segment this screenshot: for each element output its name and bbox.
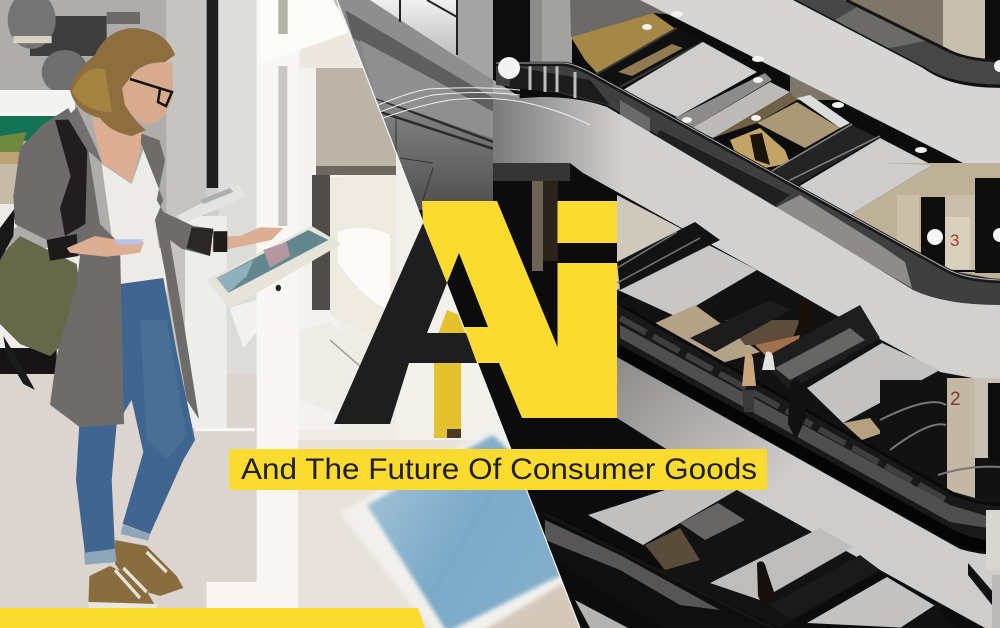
shirt bbox=[102, 150, 164, 248]
ceiling top centre bbox=[570, 0, 703, 87]
hair bbox=[70, 28, 175, 136]
lower area backdrop: 2 bbox=[950, 389, 961, 410]
room background bbox=[0, 0, 257, 614]
logo: dark half of A bbox=[334, 223, 477, 424]
chest and collar bbox=[92, 112, 142, 183]
lower area backdrop bbox=[617, 222, 1000, 505]
diagonal panels and ceilings, upper bbox=[623, 24, 932, 215]
band: upper escalator bbox=[640, 0, 1000, 163]
divider line bbox=[337, 0, 580, 628]
arms and phone bbox=[67, 236, 144, 257]
columns top centre bbox=[493, 0, 572, 80]
shoppers on escalator bbox=[742, 300, 812, 612]
glasses bbox=[130, 79, 172, 106]
yellow footer strip bbox=[0, 608, 425, 628]
lower section panels bbox=[588, 490, 937, 628]
jacket bbox=[13, 108, 124, 427]
right shoe bbox=[115, 540, 183, 596]
dark plinth under the curve bbox=[493, 163, 570, 271]
left shoe bbox=[88, 566, 157, 608]
band: central escalator bbox=[493, 97, 1000, 383]
logo: I dot bbox=[558, 201, 617, 243]
cream wall under central band bbox=[617, 195, 700, 290]
strap and cuff bbox=[55, 119, 87, 236]
lower right pillar bbox=[900, 510, 1000, 628]
curved highlight lines bbox=[378, 88, 590, 125]
backpack bbox=[0, 236, 80, 356]
panel: escalator photo bbox=[330, 0, 1000, 628]
background kiosk bbox=[177, 188, 233, 428]
upper right backdrop and escalator bbox=[790, 0, 1000, 100]
ceiling lights on upper band bbox=[671, 11, 927, 153]
logo: AI bbox=[334, 201, 617, 424]
lower mid backdrop with sign 3: 3 bbox=[950, 231, 959, 250]
woman using the kiosk bbox=[0, 28, 283, 608]
blurred tablet in the foreground bbox=[342, 433, 580, 628]
yellow column behind the logo bbox=[434, 310, 466, 438]
alcove, bed and wall bbox=[206, 0, 396, 367]
lower white floor block bbox=[298, 440, 468, 628]
band: lower escalator bbox=[617, 357, 1000, 628]
building wall top-left bbox=[337, 0, 520, 210]
logo: yellow half of A and I stem bbox=[422, 201, 617, 418]
escalator C, descending bbox=[617, 303, 1000, 552]
escalator glass, centre bbox=[496, 57, 1000, 305]
title bar: And The Future Of Consumer Goods bbox=[241, 453, 757, 486]
lower mid backdrop with sign 3 bbox=[850, 60, 1000, 290]
face bbox=[122, 62, 173, 125]
foreground kiosk bbox=[206, 0, 350, 608]
panel: kiosk store photo bbox=[0, 0, 620, 628]
lower left escalator bbox=[543, 513, 773, 628]
jeans bbox=[76, 278, 195, 554]
